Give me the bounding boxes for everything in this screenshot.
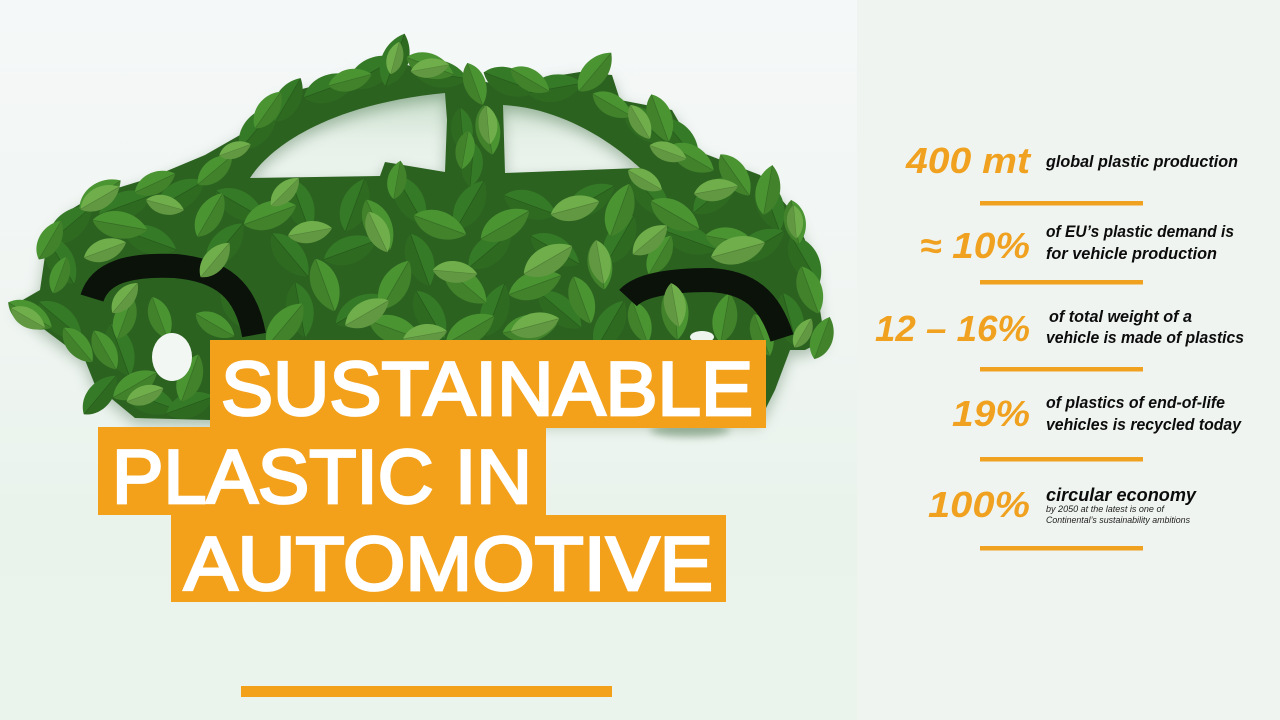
stat: 400 mt: 400 mt	[905, 140, 1032, 181]
stat: 19%: vehicles is recycled today	[1046, 416, 1242, 434]
bottom accent bar	[241, 686, 612, 697]
banner row 2	[98, 427, 546, 515]
dark wheel arches	[92, 266, 782, 338]
title line 3: AUTOMOTIVE	[184, 522, 713, 607]
stat: 10%: for vehicle production	[1046, 245, 1217, 263]
stat: 10%: of EU’s plastic demand is	[1046, 223, 1234, 241]
shadow under right wheel	[650, 423, 730, 437]
stat: 100%: Continental’s sustainability ambitions	[1046, 515, 1190, 525]
stat: 400 mt	[905, 140, 1238, 206]
stat: 12-16%: of total weight of a	[1049, 308, 1192, 326]
stat: 100%: 100%	[928, 484, 1030, 525]
title banner	[98, 340, 766, 607]
car silhouette base	[14, 60, 825, 420]
stat: 100%: circular economy	[1046, 484, 1198, 505]
wheel hole right	[690, 331, 714, 343]
stat: 100%: by 2050 at the latest is one of	[1046, 504, 1165, 514]
stat: 12-16%: 12 – 16%	[875, 308, 1030, 349]
banner row 3	[171, 515, 726, 602]
stat: 10%: ≈ 10%	[920, 225, 1030, 266]
stat: 19%: of plastics of end-of-life	[1046, 394, 1225, 412]
stat: 19%: 19%	[952, 393, 1030, 434]
stat: 19%	[952, 393, 1242, 462]
banner row 1	[210, 340, 766, 428]
mid green leaves	[2, 45, 840, 408]
wheel hole left	[152, 333, 192, 381]
window tint	[245, 88, 645, 182]
title line 2: PLASTIC IN	[112, 435, 532, 520]
stat: 12-16%: vehicle is made of plastics	[1046, 329, 1244, 347]
stat: 10%	[920, 223, 1234, 284]
stat: 12-16%	[875, 308, 1244, 372]
light green leaves	[6, 40, 818, 411]
title line 1: SUSTAINABLE	[221, 347, 753, 432]
dark leaves	[30, 29, 831, 425]
stat: 400 mt: global plastic production	[1045, 153, 1238, 171]
stat: 100%	[928, 484, 1198, 550]
car made of leaves	[2, 29, 840, 437]
